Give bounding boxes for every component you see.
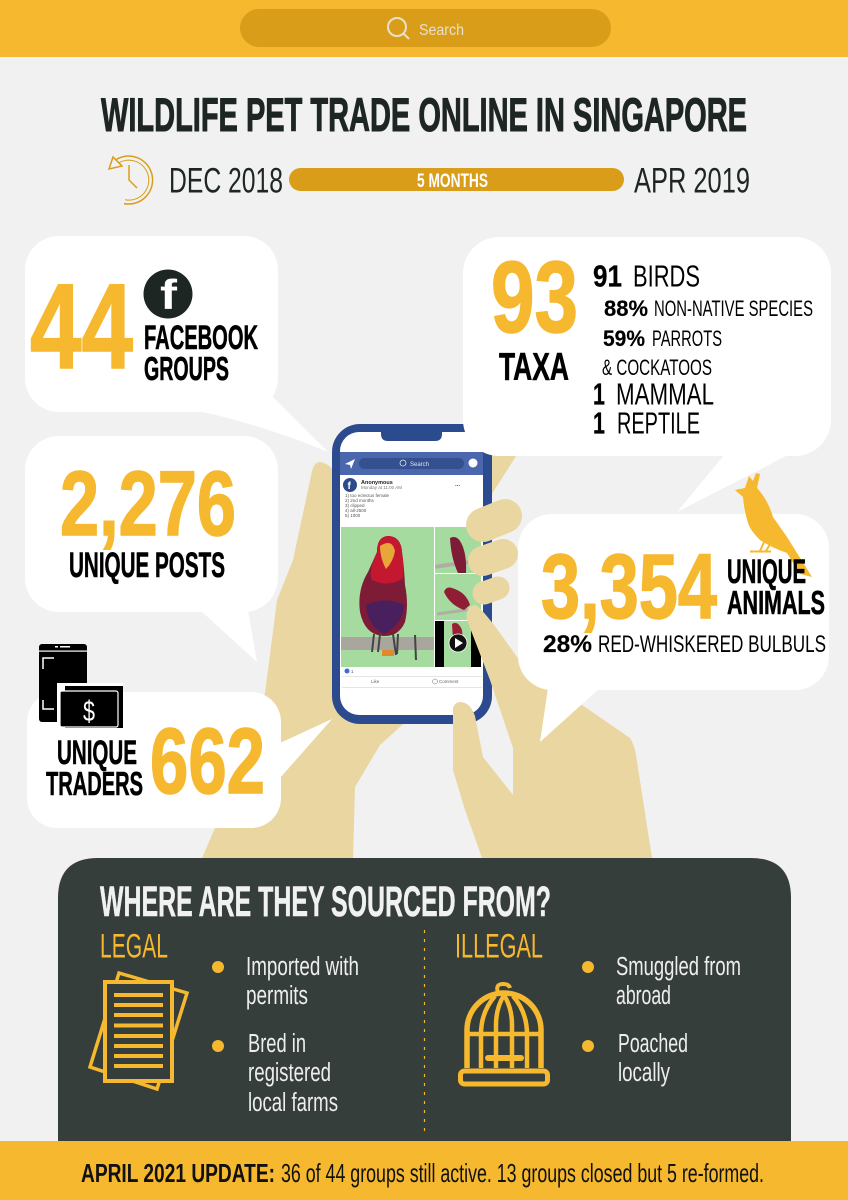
post header: 5) 1000 [345, 513, 361, 518]
illegal bullets [582, 953, 741, 1087]
bubble: unique traders: TRADERS [46, 765, 143, 802]
bubble: taxa: 91 [593, 258, 622, 294]
bubble: unique traders [27, 644, 332, 828]
header bar with search: Search [419, 22, 464, 39]
bubble: taxa: 88% [604, 296, 648, 321]
right hand wedge behind phone [480, 450, 520, 500]
icon: play button [449, 634, 467, 652]
bubble: taxa: TAXA [499, 346, 569, 389]
post header: 2) 2nd months [345, 498, 375, 503]
phone [332, 424, 492, 724]
illegal bullets: Smuggled from [616, 953, 741, 981]
bubble: taxa: 1 [593, 406, 605, 440]
bubble: unique posts [25, 436, 278, 662]
legal bullets: permits [246, 982, 308, 1010]
post header: ... [455, 482, 460, 488]
legal heading: LEGAL [100, 928, 168, 966]
footer update banner [0, 1141, 848, 1200]
left hand [202, 462, 420, 858]
fingers on phone [483, 516, 505, 593]
reactions and buttons: Like [371, 679, 380, 684]
app bar: Search [410, 462, 429, 468]
bubble: taxa: MAMMAL [616, 376, 714, 412]
footer update banner: APRIL 2021 UPDATE: [81, 1158, 275, 1188]
right hand with thumb and index finger [453, 605, 652, 858]
illegal heading: ILLEGAL [455, 928, 543, 966]
legal bullets: Bred in [248, 1030, 306, 1058]
app bar [340, 452, 483, 475]
legal bullets: local farms [248, 1089, 338, 1117]
bubble: taxa [463, 237, 831, 512]
post header: 3) clipped [345, 503, 365, 508]
timeline [109, 156, 750, 204]
legal bullets: registered [248, 1059, 331, 1087]
post header [343, 478, 460, 518]
bubble: Facebook groups: FACEBOOK [144, 319, 258, 357]
reactions and buttons: Comment [439, 679, 459, 684]
post header: 1) too eclectus female [345, 493, 390, 498]
icon: documents [90, 973, 187, 1089]
bubble: taxa: REPTILE [617, 406, 700, 440]
bubble: unique animals: 28% [543, 631, 592, 658]
icon: clock rewind [109, 156, 153, 204]
timeline: APR 2019 [634, 162, 750, 200]
reactions and buttons: 1 [351, 669, 354, 674]
post header: f [348, 481, 352, 492]
bubble: taxa: & COCKATOOS [602, 355, 712, 380]
bubble: taxa: 1 [593, 376, 605, 412]
icon: bird cage [460, 984, 548, 1084]
bubble: Facebook groups: 44 [30, 258, 133, 394]
bubble: unique posts: 2,276 [60, 453, 236, 555]
bubble: unique traders: UNIQUE [57, 734, 137, 772]
timeline: 5 MONTHS [417, 171, 488, 192]
legal bullets [212, 953, 359, 1117]
header bar with search [0, 0, 848, 57]
bubble: Facebook groups: GROUPS [144, 350, 229, 387]
bubble: unique posts: UNIQUE POSTS [69, 546, 225, 585]
post header: Anonymous [361, 480, 393, 486]
photo: main parrot [341, 527, 434, 667]
reactions and buttons [342, 668, 482, 688]
timeline: DEC 2018 [169, 162, 283, 200]
panel: where are they sourced from [58, 858, 791, 1145]
bubble: taxa: BIRDS [633, 258, 700, 294]
bubble: unique animals: 3,354 [541, 536, 717, 638]
bubble: taxa: 93 [491, 242, 578, 354]
icon: Facebook [144, 270, 192, 318]
post header: 4) all-2500 [345, 508, 367, 513]
bubble: unique traders: 662 [150, 709, 265, 813]
illegal bullets: locally [618, 1059, 670, 1087]
bubble: taxa: PARROTS [652, 326, 722, 351]
photo: thumbnails [435, 527, 481, 667]
illegal bullets: abroad [616, 982, 671, 1010]
bubble: unique animals [518, 473, 829, 742]
illegal bullets: Poached [618, 1030, 688, 1058]
bubble: Facebook groups [25, 236, 328, 452]
legal bullets: Imported with [246, 953, 359, 981]
bubble: taxa: 59% [603, 326, 645, 351]
icon: Facebook: f [160, 271, 178, 318]
icon: phone and banknote [39, 644, 123, 728]
post header: Monday at 11:00 AM [361, 485, 402, 490]
icon: phone and banknote: $ [83, 696, 95, 728]
icon: bulbul bird [735, 473, 812, 577]
